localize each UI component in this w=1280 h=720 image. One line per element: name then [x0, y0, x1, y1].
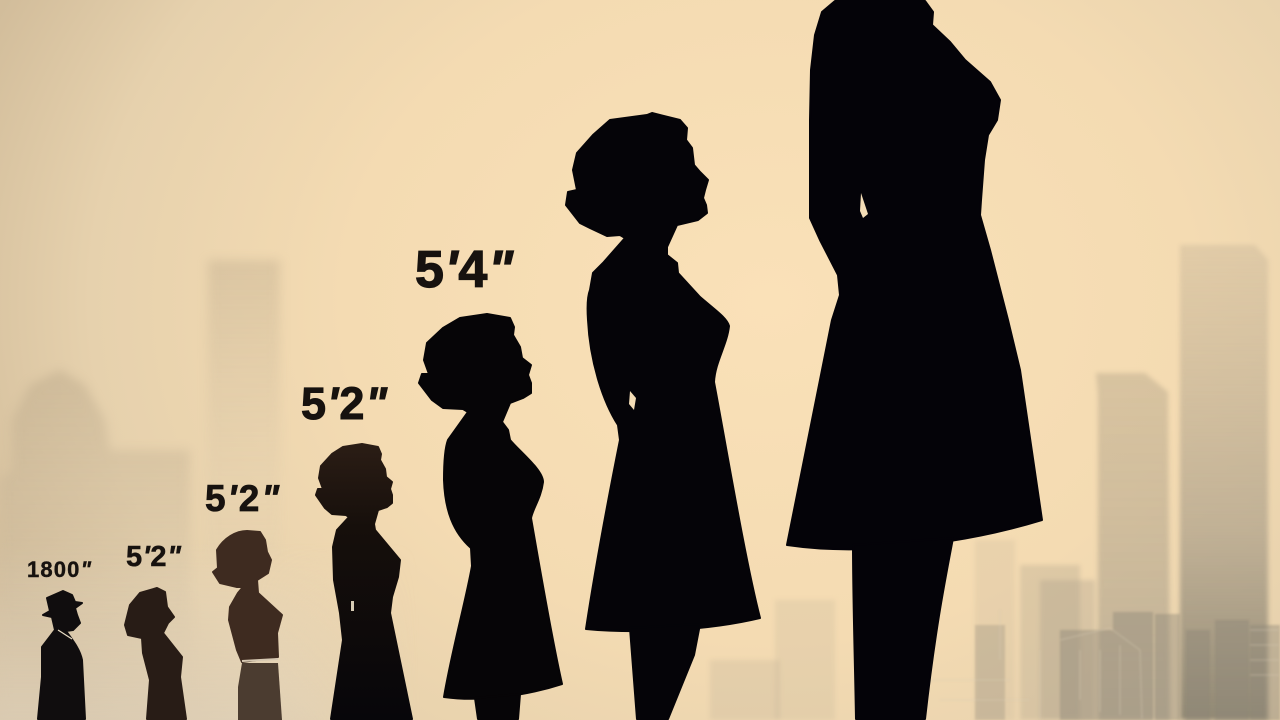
silhouette 2	[125, 588, 186, 719]
gap in silhouette 6	[629, 391, 636, 410]
bottom haze, left side	[0, 600, 310, 720]
label: 1800: 1800"	[27, 557, 92, 582]
label: 5'2 medium: 5'2"	[205, 478, 279, 519]
label: 5'2 large: 5'2"	[301, 378, 388, 429]
silhouette 1: man with hat	[38, 591, 85, 719]
right hazy skyline	[710, 245, 1280, 720]
silhouette 3	[213, 531, 282, 720]
label: 5'4: 5'4"	[415, 241, 514, 299]
silhouette 6	[566, 113, 760, 719]
silhouette 5	[419, 314, 562, 719]
silhouette 7: tallest figure	[787, 1, 1042, 719]
silhouette 4	[316, 444, 412, 719]
gap in silhouette 7	[860, 193, 868, 218]
left hazy skyline	[0, 260, 280, 720]
label: 5'2 small: 5'2"	[126, 541, 182, 573]
